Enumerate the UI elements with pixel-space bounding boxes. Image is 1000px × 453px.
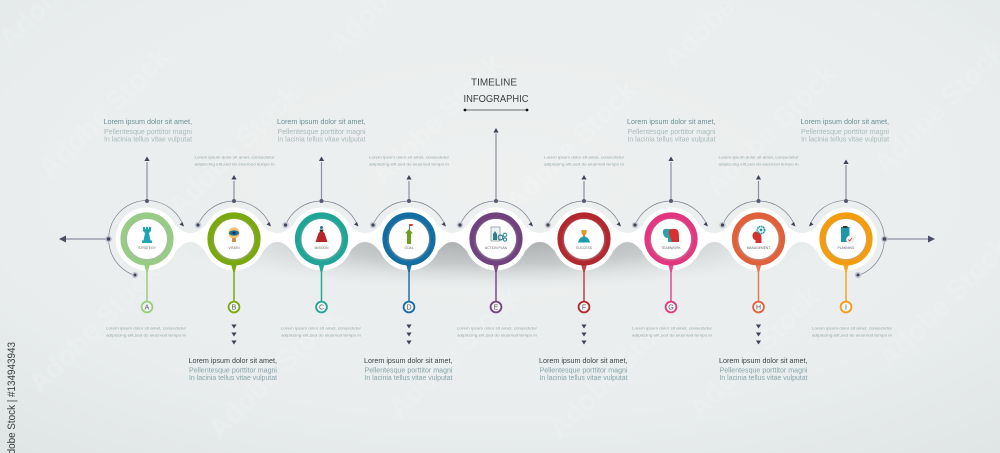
text block bottom B: In lacinia tellus vitae vulputat (189, 373, 277, 382)
small text bottom C (281, 326, 362, 338)
icon: two heads (663, 229, 679, 242)
title: TIMELINE (471, 78, 517, 88)
text block top I: Pellentesque porttitor magni (801, 127, 889, 136)
text block bottom B: Lorem ipsum dolor sit amet, (188, 356, 277, 365)
text block top A: In lacinia tellus vitae vulputat (104, 134, 192, 144)
icon: light bulb eye (228, 227, 240, 242)
step D: goal: D (406, 304, 412, 312)
step B: vision: B (232, 304, 237, 312)
step G: teamwork (632, 156, 708, 312)
step C: mission: MISSION (315, 246, 329, 250)
step I: planning: PLANNING (838, 246, 855, 250)
small text bottom G (632, 326, 713, 338)
step E: action plan (457, 128, 533, 312)
text block bottom F: Pellentesque porttitor magni (540, 366, 628, 374)
text: Adobe Stock (162, 78, 306, 221)
step C: mission (282, 156, 358, 312)
text block bottom H (719, 356, 808, 382)
text block top G: Pellentesque porttitor magni (628, 127, 716, 136)
small text bottom E (457, 326, 538, 338)
icon: clipboard check (841, 226, 854, 243)
text: Adobe Stock (382, 281, 526, 424)
small text top B: Lorem ipsum dolor sit amet, consectetur (194, 154, 275, 160)
text block top A: Lorem ipsum dolor sit amet, (104, 117, 192, 126)
text block top C: In lacinia tellus vitae vulputat (278, 134, 366, 144)
small text bottom I: adipiscing elit,sed do eiusmod tempo in (812, 332, 892, 338)
step A: strategy (105, 156, 184, 312)
step B: vision: VISION (228, 246, 240, 250)
text block bottom D: Pellentesque porttitor magni (364, 366, 453, 374)
step G: teamwork: TEAMWORK (661, 246, 682, 250)
text block bottom F: In lacinia tellus vitae vulputat (540, 373, 628, 382)
small text bottom E: adipiscing elit,sed do eiusmod tempo in (457, 332, 537, 338)
text: Adobe Stock (699, 58, 843, 201)
step F: success (545, 175, 621, 344)
small text bottom G: Lorem ipsum dolor sit amet, consectetur (632, 326, 713, 330)
down arrows (231, 324, 237, 344)
step H: management: MANAGEMENT (747, 246, 770, 250)
white timeline band (172, 222, 821, 256)
text block bottom H: Lorem ipsum dolor sit amet, (719, 356, 808, 365)
down arrows (756, 324, 761, 344)
step I: planning: I (845, 304, 847, 312)
text: Adobe Stock (22, 256, 166, 399)
step E: action plan: E (494, 304, 499, 312)
step A: strategy: A (145, 304, 150, 312)
text block bottom H: Pellentesque porttitor magni (720, 366, 808, 374)
text block bottom B: Pellentesque porttitor magni (189, 366, 277, 374)
text block top C: Lorem ipsum dolor sit amet, (277, 117, 366, 126)
step A: strategy: STRATEGY (138, 246, 157, 250)
down arrows (406, 324, 412, 344)
small text bottom E: Lorem ipsum dolor sit amet, consectetur (457, 326, 538, 330)
text block top A (104, 117, 192, 144)
text block top C (277, 117, 366, 144)
small text top D (369, 154, 450, 166)
small text top B: adipiscing elit,sed do eiusmod tempo in (194, 162, 274, 166)
small text bottom I (812, 326, 893, 338)
right end arrow (885, 236, 935, 242)
text block top A: Pellentesque porttitor magni (104, 127, 192, 136)
band shadow (156, 239, 836, 343)
small text top H: adipiscing elit,sed do eiusmod tempo in (718, 162, 798, 166)
icon: flag and arrow (405, 224, 413, 244)
small text top D: adipiscing elit,sed do eiusmod tempo in (369, 162, 449, 166)
step D: goal: GOAL (404, 246, 414, 250)
small text top F (544, 154, 625, 166)
small text top D: Lorem ipsum dolor sit amet, consectetur (369, 154, 450, 160)
small text top H (718, 154, 799, 166)
step G: teamwork: G (668, 304, 674, 312)
small text bottom G: adipiscing elit,sed do eiusmod tempo in (632, 332, 712, 338)
text block bottom D: Lorem ipsum dolor sit amet, (364, 356, 452, 365)
title: INFOGRAPHIC (464, 94, 528, 105)
text: Adobe Stock (365, 48, 509, 191)
text block bottom F: Lorem ipsum dolor sit amet, (539, 356, 628, 365)
text block bottom D: In lacinia tellus vitae vulputat (364, 373, 452, 382)
left end arrow (59, 236, 108, 242)
small text top F: adipiscing elit,sed do eiusmod tempo in (544, 162, 624, 166)
text: Adobe Stock (202, 301, 346, 444)
step D: goal (370, 175, 446, 344)
title (464, 78, 528, 111)
step B: vision (195, 175, 271, 344)
text: Adobe Stock (499, 74, 643, 217)
text block top I: Lorem ipsum dolor sit amet, (800, 117, 889, 126)
icon: plan and gears (491, 227, 507, 241)
icon: trophy person (578, 230, 590, 242)
text block bottom F (539, 356, 628, 382)
step I: planning (809, 160, 888, 312)
small text top H: Lorem ipsum dolor sit amet, consectetur (718, 154, 799, 160)
text block top C: Pellentesque porttitor magni (278, 127, 366, 136)
text: Adobe Stock (542, 301, 686, 444)
step F: success: SUCCESS (576, 246, 593, 250)
icon: head and gear (752, 226, 765, 243)
text: Adobe Stock (682, 281, 826, 424)
step E: action plan: ACTION PLAN (485, 246, 508, 250)
text block bottom H: In lacinia tellus vitae vulputat (720, 373, 808, 382)
down arrows (581, 324, 587, 344)
small text bottom C: adipiscing elit,sed do eiusmod tempo in (281, 332, 361, 338)
icon: mission figure (316, 226, 328, 242)
step F: success: F (582, 304, 586, 312)
text block top G: Lorem ipsum dolor sit amet, (627, 117, 716, 126)
text block top I: In lacinia tellus vitae vulputat (801, 134, 889, 144)
text block top I (800, 117, 889, 144)
small text bottom C: Lorem ipsum dolor sit amet, consectetur (281, 326, 362, 330)
small text bottom I: Lorem ipsum dolor sit amet, consectetur (812, 326, 893, 330)
text block bottom D (364, 356, 453, 382)
text: Adobe Stock (32, 41, 176, 184)
step C: mission: C (319, 304, 324, 312)
small text top B (194, 154, 275, 166)
small text bottom A (106, 326, 187, 338)
text block top G (627, 117, 716, 144)
step H: management: H (756, 304, 761, 312)
step H: management (719, 175, 796, 344)
icon: chess rook (142, 227, 152, 243)
small text bottom A: adipiscing elit,sed do eiusmod tempo in (106, 332, 186, 338)
small text bottom A: Lorem ipsum dolor sit amet, consectetur (106, 326, 187, 330)
small text top F: Lorem ipsum dolor sit amet, consectetur (544, 154, 625, 160)
text block bottom B (188, 356, 277, 382)
text block top G: In lacinia tellus vitae vulputat (628, 134, 716, 144)
